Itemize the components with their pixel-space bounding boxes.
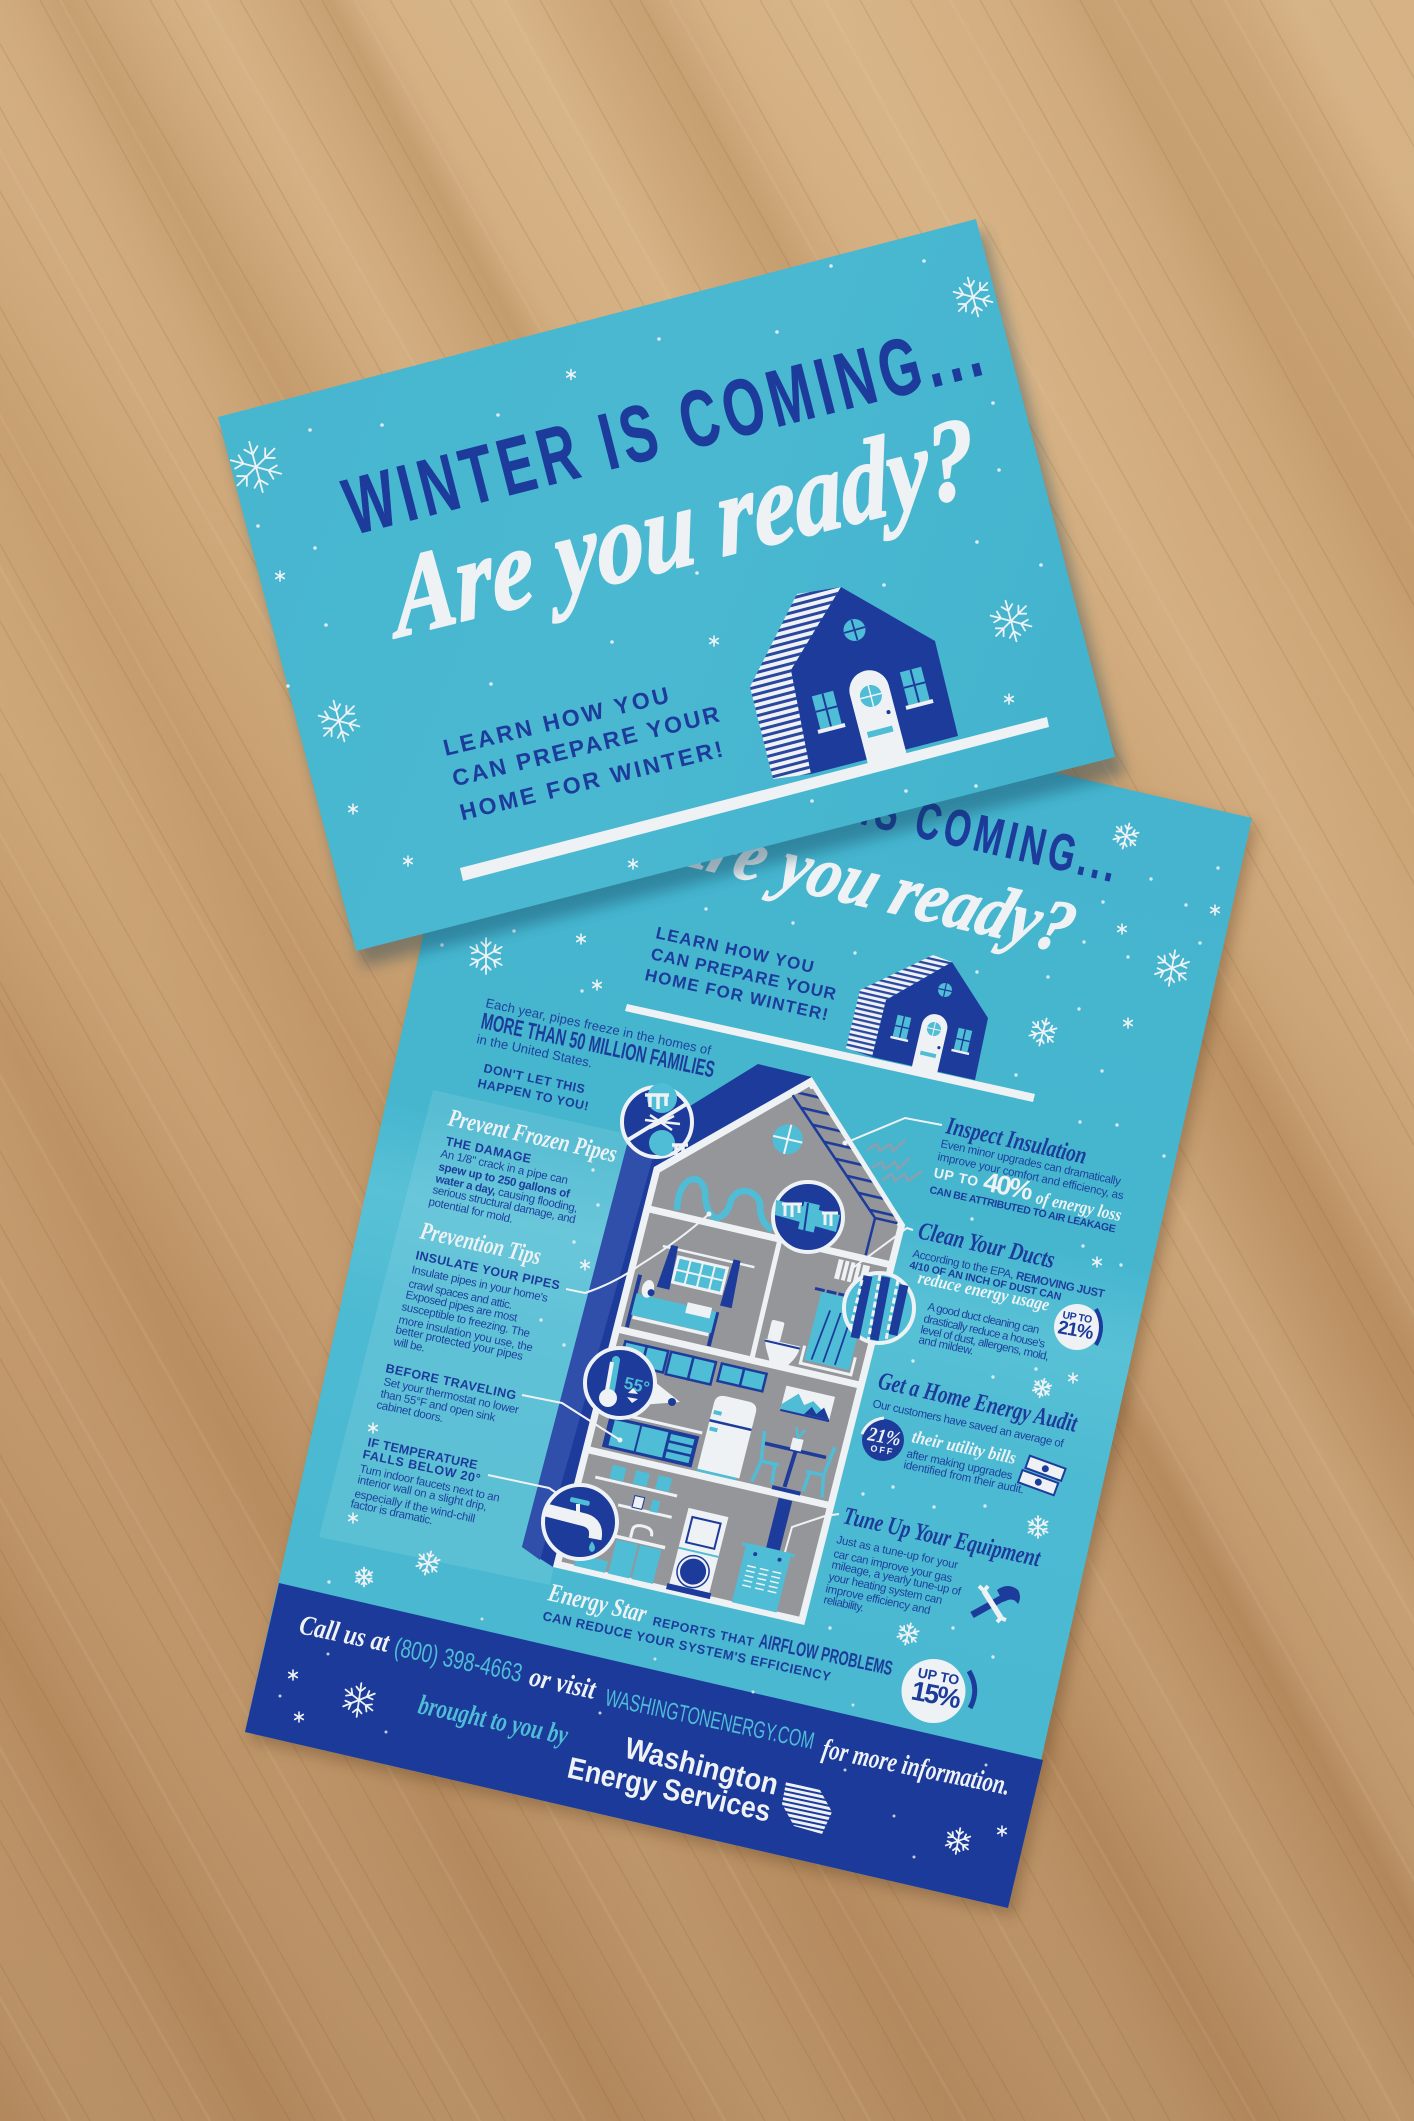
house side wall: [522, 1064, 812, 1567]
flue pipe: [766, 1498, 792, 1552]
text: clean your ducts: reduce energy usage: [916, 1267, 1051, 1315]
badge: 21 percent off: [862, 1418, 904, 1461]
rear heading: WINTER IS COMING...: [685, 739, 1122, 893]
icon: money bills: [1018, 1455, 1066, 1496]
left column text: Exposed pipes are most: [404, 1289, 519, 1325]
house outline: [553, 1048, 935, 1625]
left column text: Set your thermostat no lower: [382, 1376, 520, 1417]
left column text: serious structural damage, and: [431, 1184, 577, 1226]
left column text: [349, 1104, 619, 1527]
text: energy star note: Energy Star: [545, 1577, 650, 1628]
intro text: MORE THAN 50 MILLION FAMILIES: [479, 1007, 717, 1082]
icon: dripping faucet: [543, 1485, 617, 1559]
panel: rear flyer sheet: [245, 642, 1252, 1908]
left column text: water a day, causing flooding,: [433, 1173, 579, 1215]
icon: thermostat 55 degrees: 55°: [622, 1373, 652, 1398]
house cutaway: [553, 1048, 935, 1625]
text: energy star note: AIRFLOW PROBLEMS: [757, 1630, 895, 1680]
card background: [218, 219, 1115, 951]
logo hexagon: [782, 1782, 832, 1834]
text: clean your ducts: Clean Your Ducts: [916, 1217, 1057, 1274]
text: inspect insulation: of energy loss: [1034, 1187, 1123, 1225]
rear subheading: CAN PREPARE YOUR: [649, 944, 838, 1004]
painting: [780, 1386, 835, 1421]
interior wall: [750, 1239, 782, 1360]
rear small house icon: [846, 955, 988, 1080]
text: inspect insulation: [928, 1112, 1125, 1235]
lower cabinets: [602, 1412, 702, 1468]
text: home energy audit: identified from their audit.: [902, 1459, 1025, 1497]
left column text: potential for mold.: [427, 1196, 514, 1226]
left column text: interior wall on a slight drip,: [356, 1474, 488, 1513]
logo wordmark: Energy Services: [564, 1752, 774, 1829]
front card shadow: [225, 232, 1125, 967]
script subtitle: Are you ready?: [382, 390, 981, 663]
text: tune up: improve efficiency and: [824, 1583, 932, 1617]
left column text: FALLS BELOW 20°: [361, 1447, 482, 1486]
badge: up to 21 percent: 21%: [1056, 1317, 1095, 1344]
left column text: spew up to 250 gallons of: [437, 1161, 571, 1201]
text: clean your ducts: According to the EPA, REMOVING JUST: [911, 1248, 1106, 1301]
text: tune up: car can improve your gas: [832, 1548, 953, 1585]
left column text: more insulation you use, the: [397, 1314, 534, 1354]
intro text: [475, 995, 717, 1113]
title: WINTER IS COMING...: [336, 305, 990, 552]
text: inspect insulation: CAN BE ATTRIBUTED TO AIR LEAKAGE: [928, 1184, 1117, 1235]
footer flakes: [289, 1670, 1006, 1856]
left column text: will be.: [391, 1336, 426, 1355]
text: energy star note: CAN REDUCE YOUR SYSTEM'S EFFICIENCY: [541, 1608, 832, 1684]
left column text: Prevention Tips: [417, 1217, 544, 1270]
badge: up to 15 percent: [902, 1659, 975, 1723]
house side wall highlight: [522, 1145, 655, 1560]
call to action: [441, 682, 725, 825]
left column text: susceptible to freezing. The: [400, 1301, 531, 1340]
house icon: [750, 587, 958, 779]
text: clean your ducts: A good duct cleaning can: [926, 1301, 1040, 1337]
panel: front card: [218, 219, 1115, 951]
contact line: [297, 1610, 1013, 1802]
badge: 21 percent off: OFF: [870, 1443, 894, 1457]
bedroom window: [652, 1243, 755, 1311]
left column text: Insulate pipes in your home's: [410, 1264, 549, 1305]
icon: frozen pipe joint: [773, 1182, 843, 1252]
text: inspect insulation: Even minor upgrades can dramatically: [939, 1138, 1122, 1188]
house interior: [562, 1059, 926, 1617]
left column text: BEFORE TRAVELING: [384, 1361, 517, 1403]
text: inspect insulation: improve your comfort and efficiency, as: [936, 1151, 1125, 1202]
dining table: [752, 1420, 837, 1499]
text: clean your ducts: and mildew.: [917, 1334, 975, 1358]
front snow dots: [258, 261, 1041, 801]
rear ground line: [625, 1004, 1035, 1102]
rear subheading: HOME FOR WINTER!: [643, 965, 830, 1024]
floors: [587, 1209, 892, 1506]
contact line: WASHINGTONENERGY.COM: [603, 1684, 817, 1755]
text: tune up: your heating system can: [827, 1571, 943, 1607]
sink: [574, 1513, 669, 1585]
leader dots: [620, 1143, 845, 1440]
leader lines: [488, 1118, 942, 1552]
text: home energy audit: Our customers have saved an average of: [871, 1398, 1065, 1451]
left column text: than 55°F and open sink: [379, 1388, 497, 1424]
contact line: or visit: [527, 1662, 600, 1706]
text: home energy audit: after making upgrades: [905, 1448, 1014, 1482]
washer and dryer: [666, 1507, 730, 1599]
icon: thermostat 55 degrees: [585, 1348, 680, 1418]
text: tune up: Tune Up Your Equipment: [841, 1502, 1044, 1573]
badge: up to 21 percent: [1054, 1304, 1101, 1350]
call to action: CAN PREPARE YOUR: [449, 701, 722, 791]
intro text: DON'T LET THIS: [482, 1061, 586, 1096]
bed: [627, 1275, 722, 1346]
text: energy star note: REPORTS THAT: [651, 1614, 755, 1649]
insulation edges: [758, 1095, 922, 1262]
upper cabinets: [620, 1341, 767, 1396]
call to action: HOME FOR WINTER!: [457, 736, 725, 825]
left column text: especially if the wind-chill: [353, 1488, 476, 1526]
left column text: Prevent Frozen Pipes: [445, 1104, 619, 1168]
attic window: [769, 1121, 806, 1157]
rear subheading: LEARN HOW YOU: [654, 923, 815, 977]
text: home energy audit: Get a Home Energy Audit: [876, 1367, 1081, 1438]
ground line: [460, 717, 1049, 881]
text: clean your ducts: drastically reduce a house's: [922, 1313, 1046, 1351]
rear script heading: Are you ready?: [652, 798, 1087, 969]
text: inspect insulation: 40%: [981, 1167, 1036, 1206]
left column text: THE DAMAGE: [444, 1134, 532, 1166]
text: tune up: [822, 1502, 1044, 1617]
text: tune up: Just as a tune-up for your: [835, 1534, 959, 1572]
logo wordmark: Washington: [621, 1732, 782, 1802]
icon: wrench and hammer: [972, 1586, 1020, 1622]
attic insulation: [768, 1085, 925, 1223]
left column text: crawl spaces and attic.: [407, 1278, 514, 1312]
front snowflakes and stars: [227, 273, 1034, 869]
icon: dusty duct: [844, 1273, 914, 1343]
icon: insulation heat zigzags: [867, 1140, 922, 1181]
shower: [796, 1288, 870, 1375]
text: clean your ducts: level of dust, allergens, mold,: [919, 1324, 1050, 1363]
furnace: [728, 1542, 795, 1613]
call to action: LEARN HOW YOU: [441, 682, 671, 761]
contact line: (800) 398-4663: [392, 1632, 525, 1688]
fridge: [697, 1394, 758, 1481]
left column text: An 1/8" crack in a pipe can: [439, 1148, 569, 1187]
contact line: for more information.: [820, 1733, 1013, 1802]
panel: prevent frozen pipes backdrop: [319, 1090, 640, 1585]
left column text: better protected your pipes: [394, 1324, 524, 1363]
text: inspect insulation: Inspect Insulation: [943, 1112, 1089, 1170]
left column text: IF TEMPERATURE: [366, 1435, 479, 1472]
left column text: INSULATE YOUR PIPES: [414, 1248, 561, 1292]
rear snowflakes and stars: [349, 821, 1219, 1647]
shelves and jars: [590, 1462, 681, 1517]
text: clean your ducts: [908, 1217, 1106, 1363]
badge: 21 percent off: 21%: [865, 1423, 902, 1451]
left column text: cabinet doors.: [375, 1399, 444, 1425]
contact line: Call us at: [297, 1610, 393, 1659]
intro text: in the United States.: [475, 1031, 594, 1070]
toilet: [760, 1319, 805, 1368]
footer snow: [280, 1619, 986, 1857]
left column text: factor is dramatic.: [349, 1498, 434, 1527]
rear sheet shadow: [249, 650, 1257, 1916]
left column text: Turn indoor faucets next to an: [358, 1463, 501, 1505]
intro text: HAPPEN TO YOU!: [476, 1076, 590, 1113]
text: energy star note: [541, 1577, 895, 1684]
attic pipes: [677, 1179, 772, 1230]
text: tune up: reliability.: [822, 1594, 865, 1614]
badge: up to 15 percent: UP TO: [916, 1664, 961, 1688]
rear subheading: [643, 923, 838, 1024]
brought to you by: brought to you by: [416, 1690, 571, 1752]
badge: up to 21 percent: UP TO: [1061, 1309, 1093, 1326]
badge: up to 15 percent: 15%: [909, 1675, 964, 1714]
footer band: [245, 1583, 1043, 1908]
text: home energy audit: [871, 1367, 1081, 1497]
text: tune up: mileage, a yearly tune-up of: [830, 1559, 963, 1599]
rear snow dots: [329, 824, 1218, 1657]
text: inspect insulation: UP TO: [932, 1164, 980, 1189]
radiator: [834, 1259, 870, 1286]
icon: no frozen pipes: [622, 1083, 692, 1157]
intro text: Each year, pipes freeze in the homes of: [484, 995, 713, 1058]
text: clean your ducts: 4/10 OF AN INCH OF DUST CAN: [908, 1259, 1062, 1303]
sheet background: [245, 642, 1252, 1908]
text: home energy audit: their utility bills: [910, 1426, 1018, 1468]
